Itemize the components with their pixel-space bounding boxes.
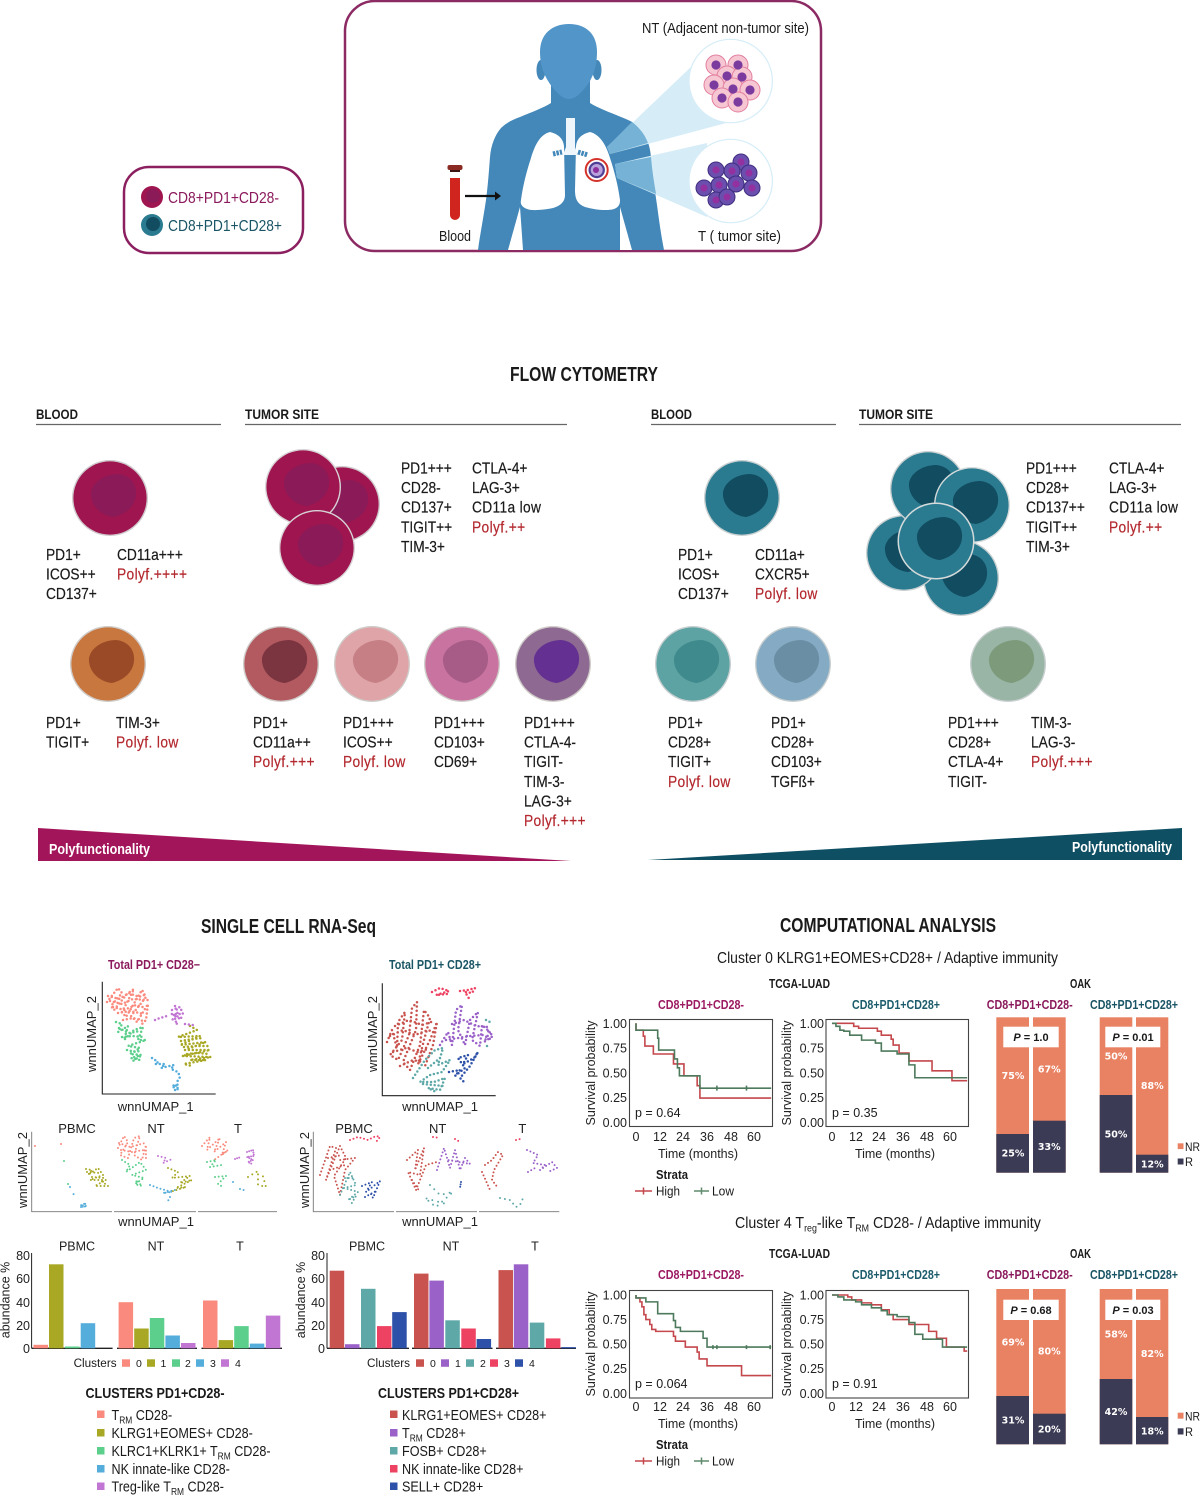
icon: tumor cells <box>689 139 772 223</box>
list: clusters CD28-: KLRC1+KLRK1+ T <box>112 1442 218 1459</box>
list: clusters CD28-: RM <box>218 1451 231 1462</box>
gradient wedge: polyfunctionality CD28+: Polyfunctionality <box>1072 839 1173 856</box>
gradient wedge: polyfunctionality CD28+ <box>648 828 1182 860</box>
list: clusters CD28-: T <box>112 1406 119 1423</box>
text: sea green subset markers: Polyf. low <box>668 773 731 791</box>
survival plot: cluster 4 CD28+: 60 <box>943 1400 957 1414</box>
list: clusters CD28+: SELL+ CD28+ <box>402 1477 483 1495</box>
icon: tumor in lung <box>586 159 608 181</box>
survival plot: cluster 0 CD28-: Survival probability <box>584 1020 598 1125</box>
survival plot: cluster 4 CD28+: Survival probability <box>780 1291 794 1396</box>
stacked bars: OAK cluster 0 CD28+ <box>1090 998 1178 1173</box>
text: tumor CD28+ markers: CD137++ <box>1026 499 1085 517</box>
text: tumor CD28- markers: CD28- <box>401 479 441 497</box>
text: orange subset markers 2: TIM-3+ <box>116 714 160 732</box>
heading: flow cytometry: FLOW CYTOMETRY <box>510 364 659 386</box>
label: tumor site: T ( tumor site) <box>698 228 781 245</box>
survival plot: cluster 0 CD28-: CD8+PD1+CD28- <box>658 998 744 1012</box>
stacked bars: OAK cluster 0 CD28-: CD8+PD1+CD28- <box>987 998 1073 1012</box>
legend: strata row 1 <box>635 1168 735 1198</box>
legend: cell populations: CD8+PD1+CD28+ <box>168 218 282 235</box>
text: blood CD28- markers 2: CD11a+++ <box>117 546 183 564</box>
survival plot: cluster 0 CD28+: 60 <box>943 1130 957 1144</box>
survival plot: cluster 0 CD28+: Survival probability <box>780 1020 794 1125</box>
survival plot: cluster 0 CD28+: 0.75 <box>800 1042 824 1056</box>
text: violet subset markers: TIM-3- <box>524 773 564 791</box>
list: clusters CD28-: CD28- <box>132 1406 172 1423</box>
stacked bars: OAK cluster 0 CD28-: 75% <box>1002 1071 1025 1082</box>
cell: blood magenta <box>72 460 148 536</box>
label: TCGA-LUAD row 1: TCGA-LUAD <box>769 977 830 991</box>
bar chart: CD28+ abundance: 0 <box>318 1342 325 1356</box>
panel: flow cytometry CD28- <box>36 406 591 861</box>
bar chart: CD28+ abundance: 80 <box>311 1249 325 1263</box>
text: blood CD28+ markers 2: CXCR5+ <box>755 566 810 584</box>
text: blood CD28- markers: CD137+ <box>46 585 97 603</box>
stacked bars: OAK cluster 4 CD28- <box>987 1268 1073 1444</box>
text: tumor CD28- markers: TIGIT++ <box>401 518 452 537</box>
survival plot: cluster 4 CD28+: 48 <box>920 1400 934 1414</box>
UMAP: total CD28- <box>84 982 216 1114</box>
text: brick subset markers: Polyf.+++ <box>253 753 315 771</box>
legend: strata row 1: Strata <box>656 1168 689 1182</box>
survival plot: cluster 4 CD28- <box>584 1268 772 1431</box>
survival plot: cluster 0 CD28-: p = 0.64 <box>635 1106 681 1120</box>
text: pink subset markers: ICOS++ <box>343 734 393 752</box>
text: blood CD28- markers: PD1+ <box>46 546 81 564</box>
text: tumor CD28- markers 2: CD11a low <box>472 499 541 517</box>
text: tumor CD28+ markers: PD1+++ <box>1026 460 1077 478</box>
UMAP: CD28+ by tissue: wnnUMAP_1 <box>401 1214 478 1229</box>
stacked bars: OAK cluster 0 CD28-: 33% <box>1038 1142 1061 1153</box>
text: violet subset markers: PD1+++ <box>524 714 575 732</box>
cell: pink subset <box>334 626 410 702</box>
survival plot: cluster 4 CD28-: 48 <box>724 1400 738 1414</box>
label: OAK row 1: OAK <box>1070 977 1091 991</box>
subtitle: cluster 4: -like T <box>817 1214 855 1232</box>
text: orange subset markers: TIGIT+ <box>46 734 89 752</box>
panel: flow cytometry CD28+ <box>648 406 1182 860</box>
bar chart: CD28- abundance: 40 <box>16 1296 30 1310</box>
survival plot: cluster 0 CD28+: p = 0.35 <box>832 1106 878 1120</box>
legend: response row 2 <box>1178 1410 1200 1439</box>
survival plot: cluster 0 CD28+: 24 <box>872 1130 886 1144</box>
text: tumor CD28- markers: PD1+++ <box>401 460 452 478</box>
text: rose subset markers: CD103+ <box>434 734 485 752</box>
bar chart: CD28+ abundance: T <box>531 1240 539 1254</box>
legend: CD28+ cluster colours: 3 <box>504 1358 510 1370</box>
text: blood CD28+ markers 2: Polyf. low <box>755 585 818 603</box>
heading: computational analysis: COMPUTATIONAL ANALYSIS <box>780 915 996 937</box>
survival plot: cluster 0 CD28+: 0.00 <box>800 1116 824 1130</box>
survival plot: cluster 0 CD28-: 12 <box>653 1130 667 1144</box>
text: blood CD28+ markers: PD1+ <box>678 546 713 564</box>
list: clusters CD28+: FOSB+ CD28+ <box>402 1442 487 1459</box>
survival plot: cluster 4 CD28+: 1.00 <box>800 1288 824 1302</box>
stacked bars: OAK cluster 4 CD28+: P = 0.03 <box>1112 1305 1154 1317</box>
icon: tumor magnification beam <box>615 143 707 217</box>
survival plot: cluster 0 CD28-: 36 <box>700 1130 714 1144</box>
heading: clusters CD28-: CLUSTERS PD1+CD28- <box>86 1385 224 1402</box>
icon: human body with lungs <box>478 24 664 250</box>
survival plot: cluster 4 CD28-: 0.50 <box>603 1338 627 1352</box>
survival plot: cluster 0 CD28+: CD8+PD1+CD28+ <box>852 998 940 1012</box>
cell cluster: tumor magenta <box>265 449 380 586</box>
text: orange subset markers: PD1+ <box>46 714 81 732</box>
UMAP: total CD28+: wnnUMAP_1 <box>401 1099 478 1114</box>
survival plot: cluster 0 CD28- <box>584 998 772 1161</box>
bar chart: CD28+ abundance: NT <box>443 1240 460 1254</box>
legend: strata row 2: Strata <box>656 1438 689 1452</box>
survival plot: cluster 4 CD28-: 0.25 <box>603 1362 627 1376</box>
bar chart: CD28+ abundance: 40 <box>311 1296 325 1310</box>
stacked bars: OAK cluster 0 CD28+: 12% <box>1141 1160 1164 1170</box>
text: tumor CD28- markers: TIM-3+ <box>401 538 445 556</box>
list: clusters CD28+: CD28+ <box>423 1424 466 1441</box>
subtitle: cluster 4: Cluster 4 T <box>735 1214 804 1232</box>
UMAP: CD28- by tissue: T <box>234 1121 242 1136</box>
text: blood CD28+ markers: ICOS+ <box>678 566 720 584</box>
stacked bars: OAK cluster 4 CD28+: 18% <box>1141 1426 1164 1438</box>
icon: blood tube <box>448 165 462 220</box>
cell cluster: tumor teal <box>866 451 1010 616</box>
survival plot: cluster 4 CD28+: Time (months) <box>855 1417 935 1431</box>
survival plot: cluster 0 CD28-: 0 <box>633 1130 640 1144</box>
bar chart: CD28- abundance: NT <box>148 1240 165 1254</box>
list: clusters CD28-: NK innate-like CD28- <box>112 1460 230 1477</box>
legend: CD28- cluster colours: 2 <box>185 1358 191 1370</box>
legend: cell populations: CD8+PD1+CD28- <box>168 190 279 207</box>
legend: CD28- cluster colours: 3 <box>210 1358 216 1370</box>
stacked bars: OAK cluster 0 CD28+: 50% <box>1105 1052 1128 1062</box>
label: TCGA-LUAD row 2: TCGA-LUAD <box>769 1247 830 1261</box>
label: OAK row 2: OAK <box>1070 1247 1091 1261</box>
subtitle: cluster 4: CD28- / Adaptive immunity <box>869 1214 1041 1232</box>
bar chart: CD28+ abundance: abundance % <box>294 1262 308 1338</box>
legend: cell populations <box>124 167 303 253</box>
list: clusters CD28-: RM <box>119 1415 132 1426</box>
UMAP: CD28+ by tissue: PBMC <box>335 1121 373 1136</box>
UMAP: CD28- by tissue: PBMC <box>58 1121 96 1136</box>
legend: response row 1 <box>1178 1140 1200 1169</box>
legend: strata row 2: Low <box>712 1454 735 1468</box>
icon: NT cells <box>689 39 772 123</box>
text: violet subset markers: CTLA-4- <box>524 734 576 752</box>
list: clusters CD28- <box>97 1406 271 1496</box>
survival plot: cluster 0 CD28+: 1.00 <box>800 1017 824 1031</box>
arrow: blood to body <box>465 192 501 200</box>
survival plot: cluster 0 CD28+: 0 <box>829 1130 836 1144</box>
legend: response row 2: R <box>1185 1425 1193 1439</box>
list: clusters CD28+: RM <box>410 1433 423 1444</box>
legend: CD28- cluster colours: 4 <box>235 1358 241 1370</box>
bar chart: CD28- abundance: 20 <box>16 1319 30 1333</box>
text: violet subset markers: Polyf.+++ <box>524 812 586 830</box>
survival plot: cluster 0 CD28+: Time (months) <box>855 1147 935 1161</box>
bar chart: CD28+ abundance: 20 <box>311 1319 325 1333</box>
text: tumor CD28- markers 2: CTLA-4+ <box>472 460 527 478</box>
text: sage subset markers: PD1+++ <box>948 714 999 732</box>
survival plot: cluster 0 CD28-: 0.50 <box>603 1066 627 1080</box>
legend: strata row 1: High <box>656 1184 680 1198</box>
cell: sage subset <box>970 626 1046 702</box>
stacked bars: OAK cluster 4 CD28+: 42% <box>1105 1407 1128 1418</box>
cell: steel blue subset <box>755 626 831 702</box>
survival plot: cluster 0 CD28-: 48 <box>724 1130 738 1144</box>
survival plot: cluster 4 CD28-: 1.00 <box>603 1288 627 1302</box>
text: tumor CD28+ markers: CD28+ <box>1026 479 1069 497</box>
legend: CD28- cluster colours: Clusters <box>74 1358 117 1370</box>
text: steel blue subset markers: PD1+ <box>771 714 806 732</box>
survival plot: cluster 0 CD28-: 60 <box>747 1130 761 1144</box>
text: sea green subset markers: CD28+ <box>668 734 711 752</box>
heading: blood CD28+: BLOOD <box>651 406 692 422</box>
text: tumor CD28+ markers: TIGIT++ <box>1026 518 1077 537</box>
survival plot: cluster 4 CD28-: 60 <box>747 1400 761 1414</box>
gradient wedge: polyfunctionality CD28-: Polyfunctionality <box>49 841 151 858</box>
UMAP: CD28+ by tissue: NT <box>429 1121 446 1136</box>
text: brick subset markers: CD11a++ <box>253 734 311 752</box>
bar chart: CD28+ abundance: PBMC <box>349 1240 385 1254</box>
survival plot: cluster 0 CD28-: 0.75 <box>603 1042 627 1056</box>
subtitle: cluster 0: Cluster 0 KLRG1+EOMES+CD28+ / Adaptive immunity <box>717 950 1058 967</box>
text: sage subset markers: TIGIT- <box>948 773 987 791</box>
subtitle: cluster 4: RM <box>855 1223 869 1235</box>
text: orange subset markers 2: Polyf. low <box>116 734 179 752</box>
legend: CD28+ cluster colours: 4 <box>529 1358 535 1370</box>
legend: CD28+ cluster colours: 2 <box>480 1358 486 1370</box>
title: total CD28- UMAP: Total PD1+ CD28− <box>108 958 200 972</box>
survival plot: cluster 4 CD28+: 24 <box>872 1400 886 1414</box>
survival plot: cluster 0 CD28+: 0.25 <box>800 1091 824 1105</box>
text: sea green subset markers: TIGIT+ <box>668 753 711 771</box>
UMAP: CD28+ by tissue <box>297 1121 559 1229</box>
heading: tumor site CD28+: TUMOR SITE <box>859 406 933 422</box>
heading: single cell RNA-Seq: SINGLE CELL RNA-Seq <box>201 916 376 938</box>
survival plot: cluster 4 CD28+: 12 <box>849 1400 863 1414</box>
text: tumor CD28+ markers 2: CTLA-4+ <box>1109 460 1164 478</box>
UMAP: CD28- by tissue: wnnUMAP_1 <box>117 1214 194 1229</box>
text: blood CD28+ markers: CD137+ <box>678 585 729 603</box>
cell: brick subset <box>243 626 319 702</box>
legend: CD28- cluster colours: 1 <box>160 1358 166 1370</box>
text: violet subset markers: LAG-3+ <box>524 792 572 811</box>
list: clusters CD28+: T <box>402 1424 410 1441</box>
UMAP: total CD28-: wnnUMAP_1 <box>117 1099 194 1114</box>
survival plot: cluster 4 CD28+: 0.75 <box>800 1313 824 1327</box>
text: tumor CD28+ markers 2: CD11a low <box>1109 499 1178 517</box>
stacked bars: OAK cluster 0 CD28+: P = 0.01 <box>1112 1032 1154 1044</box>
UMAP: total CD28+ <box>365 983 496 1114</box>
UMAP: total CD28+: wnnUMAP_2 <box>365 996 380 1073</box>
survival plot: cluster 0 CD28+: 0.50 <box>800 1066 824 1080</box>
UMAP: CD28- by tissue: wnnUMAP_2 <box>15 1132 30 1209</box>
stacked bars: OAK cluster 4 CD28-: 31% <box>1002 1416 1025 1426</box>
legend: CD28+ cluster colours: Clusters <box>367 1358 410 1370</box>
survival plot: cluster 4 CD28-: 12 <box>653 1400 667 1414</box>
text: sage subset markers 2: LAG-3- <box>1031 734 1075 752</box>
text: sage subset markers 2: Polyf.+++ <box>1031 753 1093 771</box>
text: tumor CD28- markers: CD137+ <box>401 499 452 517</box>
survival plot: cluster 0 CD28+ <box>780 998 968 1161</box>
survival plot: cluster 0 CD28+: 12 <box>849 1130 863 1144</box>
survival plot: cluster 4 CD28+: 0.50 <box>800 1338 824 1352</box>
text: tumor CD28- markers 2: Polyf.++ <box>472 518 526 537</box>
legend: CD28- cluster colours: 0 <box>136 1358 142 1370</box>
text: violet subset markers: TIGIT- <box>524 753 563 771</box>
survival plot: cluster 0 CD28+: 48 <box>920 1130 934 1144</box>
survival plot: cluster 4 CD28+: 36 <box>896 1400 910 1414</box>
survival plot: cluster 4 CD28-: 24 <box>676 1400 690 1414</box>
heading: blood CD28-: BLOOD <box>36 406 78 422</box>
stacked bars: OAK cluster 0 CD28+: CD8+PD1+CD28+ <box>1090 998 1178 1012</box>
text: tumor CD28+ markers: TIM-3+ <box>1026 538 1070 556</box>
survival plot: cluster 0 CD28-: 24 <box>676 1130 690 1144</box>
stacked bars: OAK cluster 0 CD28+: 88% <box>1141 1081 1164 1092</box>
text: steel blue subset markers: TGFß+ <box>771 773 815 791</box>
list: clusters CD28+: NK innate-like CD28+ <box>402 1460 523 1477</box>
survival plot: cluster 4 CD28+: CD8+PD1+CD28+ <box>852 1268 940 1282</box>
survival plot: cluster 4 CD28+: p = 0.91 <box>832 1377 878 1391</box>
list: clusters CD28-: CD28- <box>231 1442 271 1459</box>
cell: sea green subset <box>655 626 731 702</box>
heading: clusters CD28+: CLUSTERS PD1+CD28+ <box>378 1385 519 1402</box>
survival plot: cluster 4 CD28+ <box>780 1268 968 1431</box>
cell: rose subset <box>424 626 500 702</box>
heading: tumor site CD28-: TUMOR SITE <box>245 406 319 422</box>
survival plot: cluster 4 CD28-: 0 <box>633 1400 640 1414</box>
survival plot: cluster 4 CD28+: 0 <box>829 1400 836 1414</box>
cell: blood teal <box>704 460 780 536</box>
survival plot: cluster 4 CD28-: p = 0.064 <box>635 1377 688 1391</box>
survival plot: cluster 4 CD28+: 0.00 <box>800 1387 824 1401</box>
text: blood CD28- markers 2: Polyf.++++ <box>117 566 187 584</box>
survival plot: cluster 0 CD28-: 0.25 <box>603 1091 627 1105</box>
bar chart: CD28- abundance: 60 <box>16 1272 30 1286</box>
gradient wedge: polyfunctionality CD28- <box>38 828 571 861</box>
text: tumor CD28- markers 2: LAG-3+ <box>472 479 520 497</box>
cell: violet subset <box>515 626 591 702</box>
stacked bars: OAK cluster 0 CD28+: 50% <box>1105 1130 1128 1140</box>
text: blood CD28+ markers 2: CD11a+ <box>755 546 805 564</box>
list: clusters CD28-: Treg-like T <box>112 1477 171 1495</box>
stacked bars: OAK cluster 4 CD28+: 82% <box>1141 1349 1164 1360</box>
UMAP: total CD28-: wnnUMAP_2 <box>84 996 99 1073</box>
bar chart: CD28- abundance <box>0 1240 282 1356</box>
text: sage subset markers: CTLA-4+ <box>948 753 1003 771</box>
survival plot: cluster 4 CD28-: 0.00 <box>603 1387 627 1401</box>
bar chart: CD28+ abundance: 60 <box>311 1272 325 1286</box>
label: blood: Blood <box>439 228 471 245</box>
stacked bars: OAK cluster 4 CD28-: 69% <box>1002 1338 1025 1349</box>
text: steel blue subset markers: CD28+ <box>771 734 814 752</box>
panel: anatomy of sampling sites <box>345 1 821 251</box>
text: blood CD28- markers: ICOS++ <box>46 566 96 584</box>
bar chart: CD28- abundance: 80 <box>16 1249 30 1263</box>
bar chart: CD28- abundance: PBMC <box>59 1240 95 1254</box>
survival plot: cluster 0 CD28-: 1.00 <box>603 1017 627 1031</box>
legend: CD28- cluster colours <box>74 1358 241 1370</box>
text: tumor CD28+ markers 2: Polyf.++ <box>1109 518 1163 537</box>
text: pink subset markers: Polyf. low <box>343 753 406 771</box>
UMAP: CD28+ by tissue: wnnUMAP_2 <box>297 1132 312 1209</box>
survival plot: cluster 4 CD28-: 0.75 <box>603 1313 627 1327</box>
text: rose subset markers: CD69+ <box>434 753 477 771</box>
legend: strata row 2 <box>635 1438 735 1468</box>
cell: orange subset <box>70 626 146 702</box>
survival plot: cluster 4 CD28-: 36 <box>700 1400 714 1414</box>
text: sea green subset markers: PD1+ <box>668 714 703 732</box>
text: pink subset markers: PD1+++ <box>343 714 394 732</box>
text: rose subset markers: PD1+++ <box>434 714 485 732</box>
survival plot: cluster 4 CD28-: Survival probability <box>584 1291 598 1396</box>
legend: CD28+ cluster colours <box>367 1358 535 1370</box>
legend: CD28+ cluster colours: 1 <box>455 1358 461 1370</box>
stacked bars: OAK cluster 4 CD28+ <box>1090 1268 1178 1444</box>
subtitle: cluster 4: reg <box>804 1223 817 1235</box>
icon: NT magnification beam <box>607 65 730 154</box>
legend: CD28+ cluster colours: 0 <box>430 1358 436 1370</box>
stacked bars: OAK cluster 4 CD28-: P = 0.68 <box>1010 1305 1052 1317</box>
text: brick subset markers: PD1+ <box>253 714 288 732</box>
bar chart: CD28+ abundance <box>294 1240 576 1356</box>
legend: strata row 1: Low <box>712 1184 735 1198</box>
label: NT site: NT (Adjacent non-tumor site) <box>642 20 809 37</box>
UMAP: CD28+ by tissue: T <box>518 1121 526 1136</box>
survival plot: cluster 4 CD28-: CD8+PD1+CD28- <box>658 1268 744 1282</box>
title: total CD28+ UMAP: Total PD1+ CD28+ <box>389 958 481 972</box>
stacked bars: OAK cluster 4 CD28-: 80% <box>1038 1346 1061 1358</box>
stacked bars: OAK cluster 4 CD28+: 58% <box>1105 1330 1128 1340</box>
bar chart: CD28- abundance: T <box>236 1240 244 1254</box>
list: clusters CD28+: KLRG1+EOMES+ CD28+ <box>402 1406 547 1423</box>
text: steel blue subset markers: CD103+ <box>771 753 822 771</box>
stacked bars: OAK cluster 0 CD28-: 25% <box>1002 1148 1025 1160</box>
text: tumor CD28+ markers 2: LAG-3+ <box>1109 479 1157 497</box>
stacked bars: OAK cluster 0 CD28-: 67% <box>1038 1064 1061 1076</box>
survival plot: cluster 0 CD28+: 36 <box>896 1130 910 1144</box>
UMAP: CD28- by tissue <box>15 1121 277 1229</box>
legend: response row 1: R <box>1185 1155 1193 1169</box>
bar chart: CD28- abundance: 0 <box>23 1342 30 1356</box>
list: clusters CD28-: KLRG1+EOMES+ CD28- <box>112 1424 253 1441</box>
stacked bars: OAK cluster 4 CD28-: CD8+PD1+CD28- <box>987 1268 1073 1282</box>
survival plot: cluster 0 CD28-: Time (months) <box>658 1147 738 1161</box>
list: clusters CD28+ <box>390 1406 547 1495</box>
UMAP: CD28- by tissue: NT <box>147 1121 165 1136</box>
survival plot: cluster 4 CD28-: Time (months) <box>658 1417 738 1431</box>
stacked bars: OAK cluster 4 CD28-: 20% <box>1038 1424 1061 1436</box>
stacked bars: OAK cluster 0 CD28-: P = 1.0 <box>1013 1032 1049 1044</box>
stacked bars: OAK cluster 4 CD28+: CD8+PD1+CD28+ <box>1090 1268 1178 1282</box>
list: clusters CD28-: CD28- <box>184 1477 224 1495</box>
text: sage subset markers: CD28+ <box>948 734 991 752</box>
text: sage subset markers 2: TIM-3- <box>1031 714 1071 732</box>
legend: strata row 2: High <box>656 1454 680 1468</box>
survival plot: cluster 4 CD28+: 0.25 <box>800 1362 824 1376</box>
stacked bars: OAK cluster 0 CD28- <box>987 998 1073 1173</box>
survival plot: cluster 0 CD28-: 0.00 <box>603 1116 627 1130</box>
